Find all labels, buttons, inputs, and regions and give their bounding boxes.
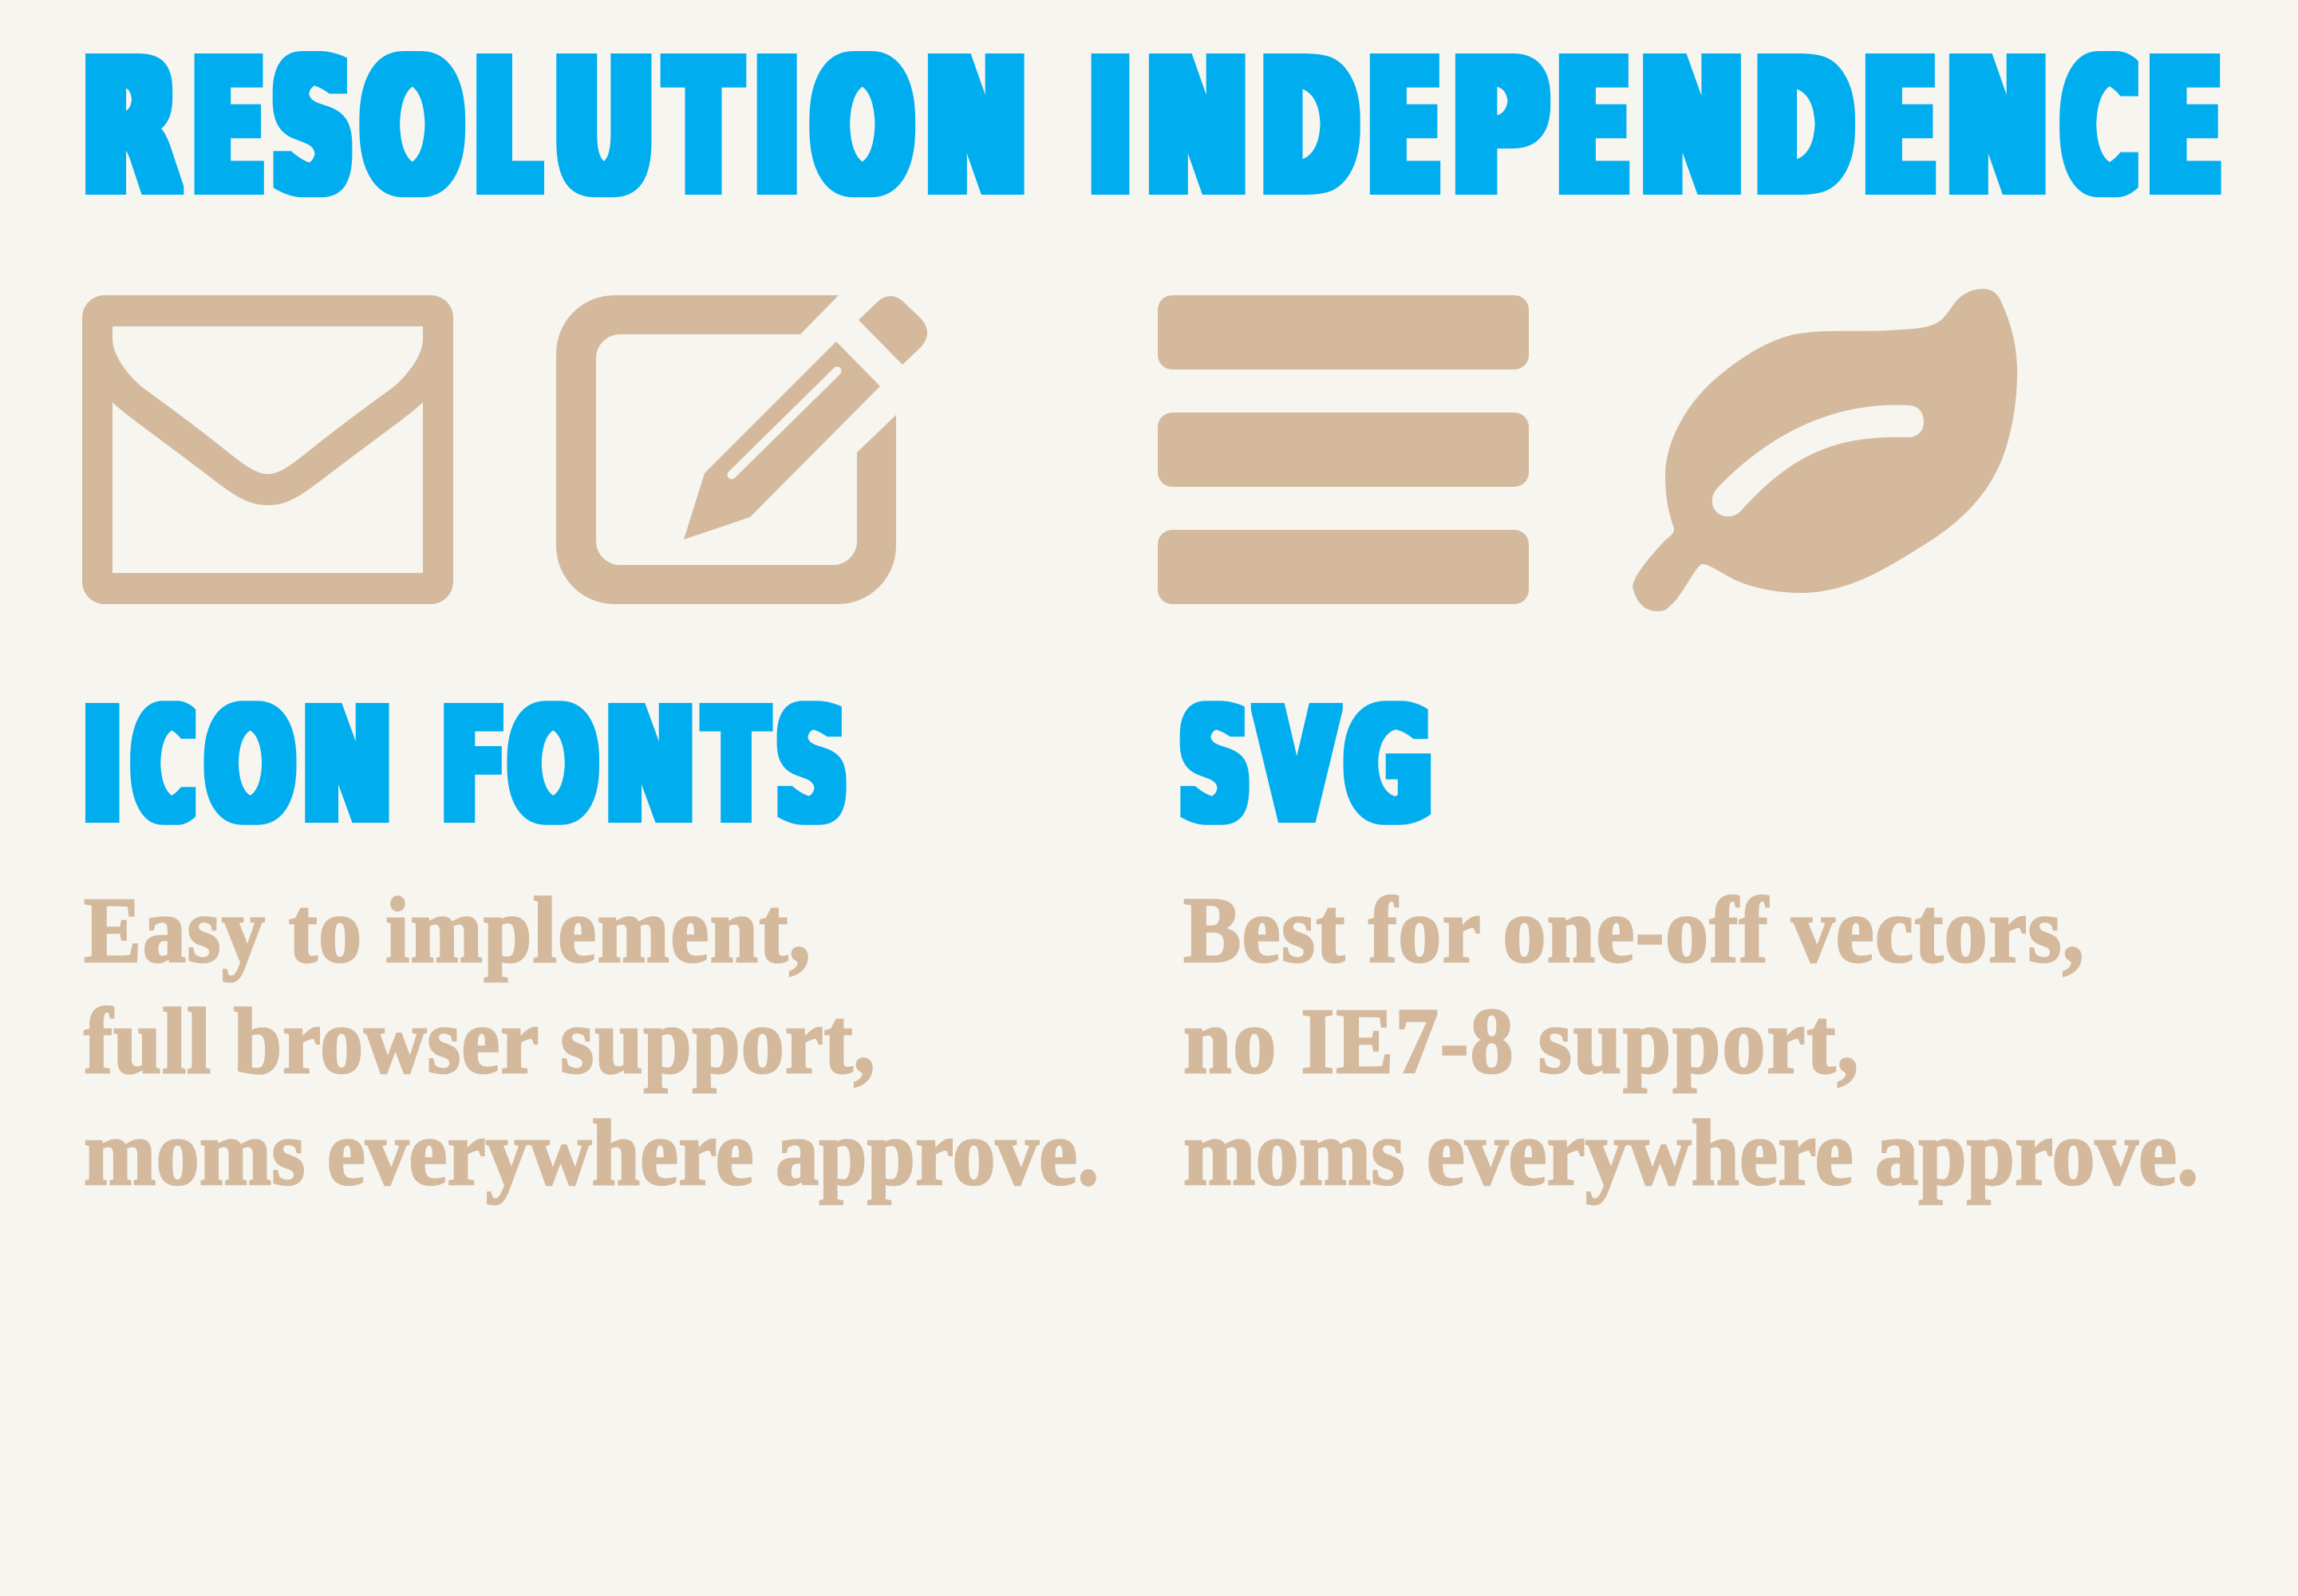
heading: icon fonts: N	[302, 675, 391, 855]
heading: icon fonts: T	[706, 675, 766, 855]
title: N	[1641, 22, 1743, 235]
text block: icon fonts description: moms everywhere approve.	[84, 1100, 1099, 1205]
title: I	[755, 22, 800, 235]
heading: icon fonts: C	[133, 675, 194, 855]
title: N	[926, 22, 1027, 235]
heading: icon fonts: S	[777, 675, 846, 855]
heading: icon fonts: N	[606, 675, 694, 855]
title: I	[1090, 22, 1131, 235]
title: O	[362, 22, 462, 235]
heading: svg	[1179, 675, 1431, 855]
heading: icon fonts: O	[206, 675, 294, 855]
icon: envelope	[82, 295, 453, 604]
title: E	[2149, 22, 2220, 235]
title: E	[1558, 22, 1629, 235]
heading: icon fonts: O	[509, 675, 598, 855]
title	[83, 22, 2221, 235]
text block: svg description: Best for one-off vectors,	[1183, 878, 2084, 982]
title: E	[194, 22, 263, 235]
heading: icon fonts: F	[443, 675, 504, 855]
text block: icon fonts description: full browser support,	[84, 989, 875, 1093]
icon: hamburger menu	[1158, 295, 1529, 604]
icon: edit pencil	[556, 295, 927, 604]
heading: svg: V	[1258, 675, 1337, 855]
title: E	[1865, 22, 1935, 235]
title: L	[476, 22, 538, 235]
title: O	[812, 22, 912, 235]
title: T	[669, 22, 738, 235]
title: E	[1369, 22, 1439, 235]
text block: icon fonts description	[84, 878, 1099, 1205]
heading: icon fonts	[83, 675, 847, 855]
title: C	[2063, 22, 2136, 235]
title: D	[1262, 22, 1357, 235]
text block: icon fonts description: Easy to implement,	[84, 878, 811, 982]
heading: icon fonts: I	[83, 675, 121, 855]
text block: svg description: no IE7-8 support,	[1183, 989, 1858, 1093]
title: U	[554, 22, 654, 235]
title: N	[1947, 22, 2048, 235]
title: R	[83, 22, 178, 235]
text block: svg description: moms everywhere approve.	[1183, 1100, 2198, 1205]
title: S	[274, 22, 351, 235]
heading: svg: G	[1345, 675, 1431, 855]
title: N	[1147, 22, 1248, 235]
title: D	[1755, 22, 1852, 235]
heading: svg: S	[1179, 675, 1249, 855]
text block: svg description	[1183, 878, 2198, 1205]
title: P	[1452, 22, 1547, 235]
icon: leaf	[1633, 289, 2017, 611]
